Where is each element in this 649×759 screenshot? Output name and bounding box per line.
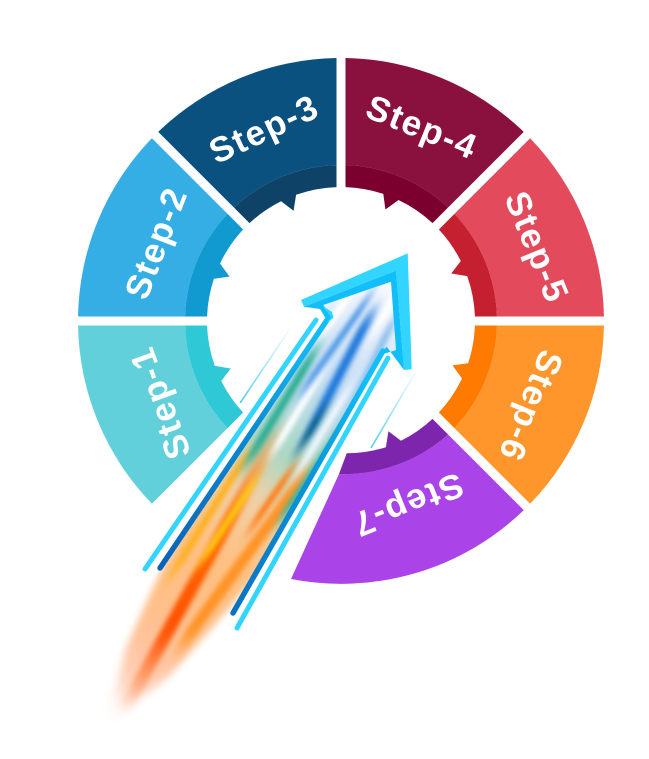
step 4 main band [346,58,524,208]
step 2 main band [78,138,228,316]
infographic: seven step wheel with arrow [78,58,604,716]
step 4 inner band with tooth [346,165,448,223]
speed line left [240,326,292,403]
step 4 label: Step-4 [360,88,483,167]
step 2 label: Step-2 [117,182,196,305]
speed line right [371,368,418,448]
step 7 label: Step-7 [346,465,469,544]
arrow shaft outer lines [145,320,388,628]
step 5 inner band with tooth [413,214,527,328]
segment: step 5 [413,138,649,370]
segment: step 3 [158,6,390,249]
step 1 label: Step-1 [122,341,199,464]
arrowhead outer border [301,253,412,370]
step 6 inner band with tooth [439,326,497,428]
step 3 main band [158,6,390,238]
step 3 inner band with tooth [234,135,348,249]
segment: step 4 [346,58,524,223]
arrowhead inner border [304,271,404,370]
step 7 main band [291,434,524,584]
segment: step 7 [291,419,524,584]
segment: step 1 [26,272,269,504]
step 1 inner band with tooth [155,314,269,428]
step 2 inner band with tooth [185,214,243,316]
arrow barb highlight [322,306,334,322]
arrow shaft inner lines [160,320,383,613]
step 1 main band [26,272,258,504]
flame trail [111,284,396,716]
arrow: rising arrow with flame trail [111,253,416,716]
step 6 main band [454,326,604,504]
step 3 label: Step-3 [203,87,325,172]
segment: step 6 [439,326,604,504]
step 6 label: Step-6 [491,344,570,467]
segment: step 2 [78,138,243,316]
step 5 label: Step-5 [497,186,576,309]
step 7 inner band with tooth [339,419,448,474]
step 5 main band [424,138,649,370]
